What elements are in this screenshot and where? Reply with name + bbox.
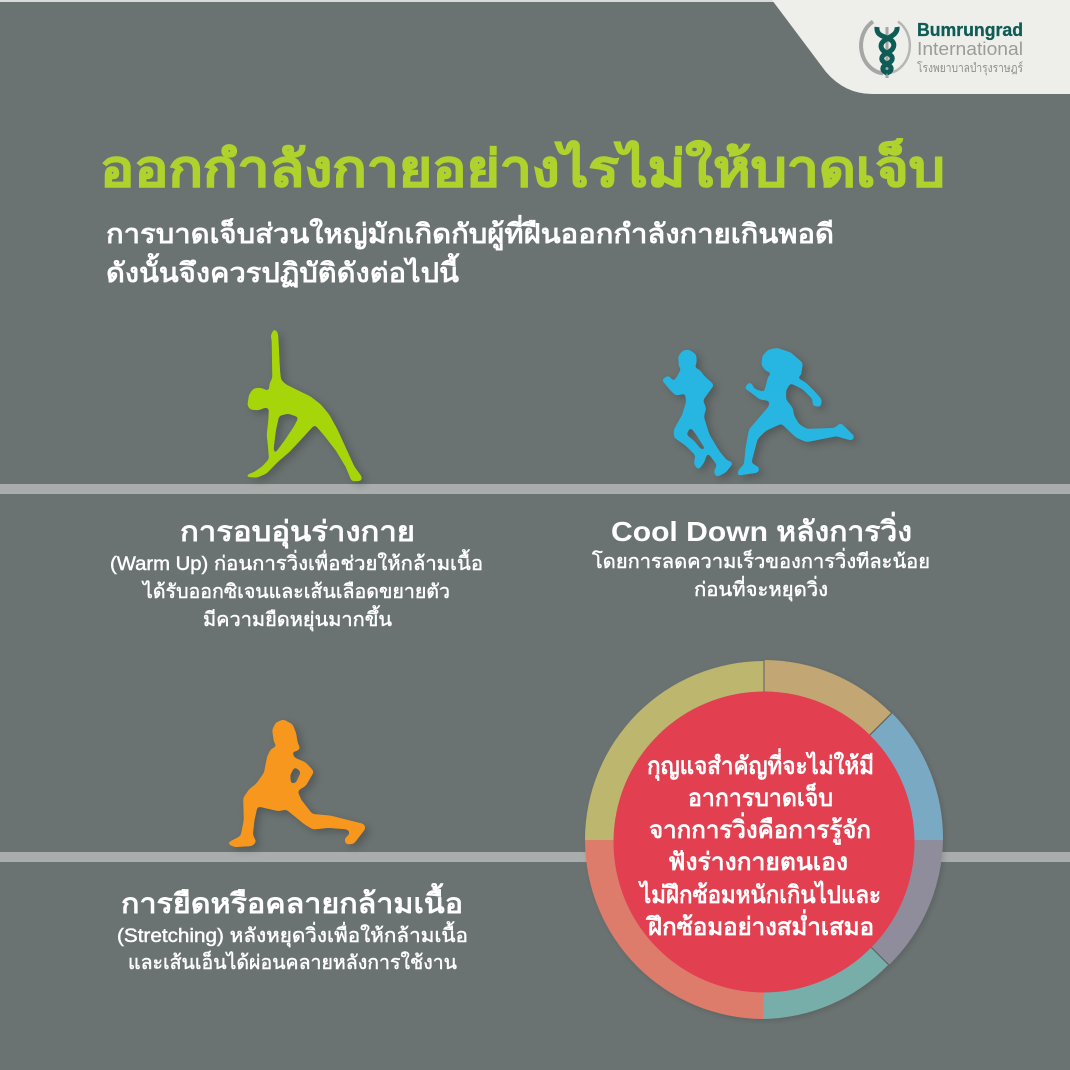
- donut callout: [585, 660, 943, 1019]
- text block: cool down: โดยการลดความเร็วของการวิ่งทีละน้อย: [592, 548, 930, 573]
- logo: Bumrungrad International: Bumrungrad: [917, 20, 1023, 40]
- text block: stretching: (Stretching) หลังหยุดวิ่งเพื่อให้กล้ามเนื้อ: [117, 921, 468, 948]
- logo: Bumrungrad International: International: [917, 39, 1023, 59]
- donut ring segments: [585, 660, 943, 1019]
- icon: lunge stretch: [229, 721, 364, 846]
- callout text: ไม่ฝึกซ้อมหนักเกินไปและ: [637, 880, 881, 909]
- title: ออกกำลังกายอย่างไรไม่ให้บาดเจ็บ: [100, 138, 945, 197]
- callout text: [637, 748, 881, 941]
- intro text: การบาดเจ็บส่วนใหญ่มักเกิดกับผู้ที่ฝืนออกกำลังกายเกินพอดี: [106, 214, 834, 251]
- intro text: [106, 214, 834, 288]
- text block: warm up: มีความยืดหยุ่นมากขึ้น: [203, 605, 392, 632]
- intro text: ดังนั้นจึงควรปฏิบัติดังต่อไปนี้: [106, 252, 460, 288]
- text block: stretching: การยืดหรือคลายกล้ามเนื้อ: [121, 882, 463, 919]
- logo: Bumrungrad International: [861, 20, 1023, 78]
- runner left: [663, 351, 732, 476]
- text block: warm up: ได้รับออกซิเจนและเส้นเลือดขยายตัว: [141, 580, 450, 603]
- text block: stretching: [117, 882, 468, 974]
- text block: stretching: และเส้นเอ็นได้ผ่อนคลายหลังการใช้งาน: [128, 950, 457, 974]
- text block: cool down: [592, 511, 930, 602]
- icon: two runners: [663, 349, 853, 476]
- callout text: จากการวิ่งคือการรู้จัก: [649, 812, 871, 845]
- ground line: lower: [0, 852, 1070, 862]
- logo panel: [772, 0, 1070, 94]
- callout text: อาการบาดเจ็บ: [688, 782, 833, 812]
- text block: warm up: การอบอุ่นร่างกาย: [180, 516, 415, 549]
- ground line: upper: [0, 484, 1070, 494]
- logo: Bumrungrad International: โรงพยาบาลบำรุงราษฎร์: [917, 61, 1023, 76]
- text block: cool down: ก่อนที่จะหยุดวิ่ง: [694, 576, 828, 602]
- text block: warm up: [110, 516, 483, 632]
- text block: cool down: Cool Down หลังการวิ่ง: [611, 511, 912, 547]
- callout text: กุญแจสำคัญที่จะไม่ให้มี: [647, 748, 874, 782]
- icon: yoga triangle pose: [247, 330, 361, 480]
- text block: warm up: (Warm Up) ก่อนการวิ่งเพื่อช่วยให้กล้ามเนื้อ: [110, 549, 483, 575]
- runner right: [738, 349, 853, 474]
- callout text: ฝึกซ้อมอย่างสม่ำเสมอ: [645, 909, 874, 941]
- red centre circle: [614, 692, 914, 992]
- callout text: ฟังร่างกายตนเอง: [668, 849, 848, 876]
